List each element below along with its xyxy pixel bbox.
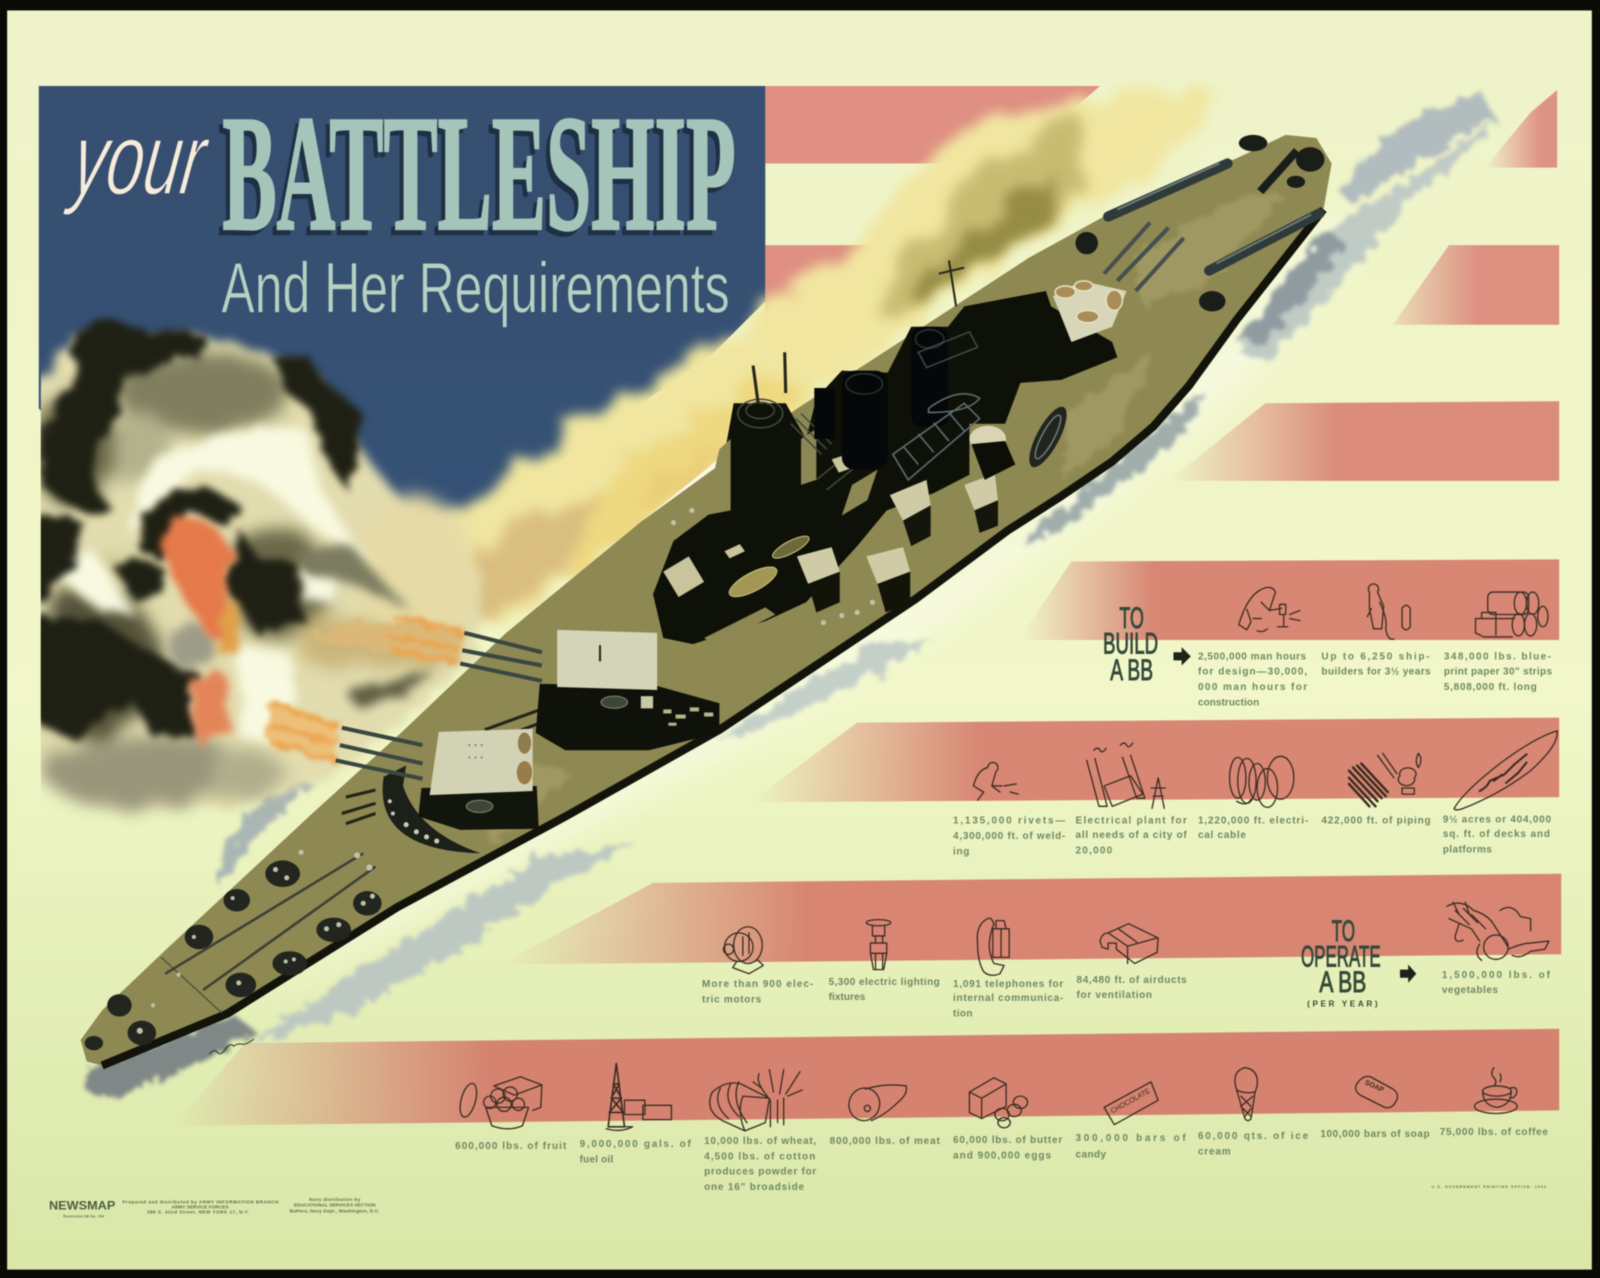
text: decks: 9½ acres or 404,000: [1443, 815, 1551, 826]
icon: ham: [845, 1085, 906, 1124]
text: telephones: 1,091 telephones for: [953, 979, 1063, 990]
second turret base: [536, 684, 719, 750]
bridge wings: [738, 399, 878, 490]
port edge highlight: [606, 449, 735, 553]
text: rivets: 4,300,000 ft. of weld-: [953, 831, 1065, 842]
funnels: [814, 327, 948, 470]
icon: oil derrick: [606, 1063, 671, 1130]
smoke: grey streaks: [167, 541, 434, 706]
icon: cable reels: [1230, 756, 1294, 807]
starboard motor launch: [1022, 402, 1074, 472]
hull side shadow: [102, 209, 1323, 1066]
icon: soap bar: [1356, 1076, 1397, 1108]
text: telephones: [953, 979, 1063, 1020]
text: electric cable: 1,220,000 ft. electri-: [1198, 816, 1308, 827]
icon: ice cream cone: [1235, 1068, 1257, 1121]
smoke: muzzle blast plumes: [267, 616, 464, 763]
illustration: battleship: [81, 135, 1332, 1066]
second turret barrels: [460, 633, 542, 681]
footer: newsmap logo: [49, 1198, 115, 1219]
heading: to build a battleship: [1103, 602, 1158, 687]
footer: distribution credit: ARMY SERVICE FORCES: [171, 1204, 229, 1209]
deck bolts: [671, 508, 875, 625]
footer: distribution credit: 386 S. 42nd Street, NEW YORK 17, N.Y.: [147, 1209, 249, 1214]
icon: electric motor: [723, 927, 763, 974]
text: airducts: [1077, 975, 1187, 1001]
text: butter and eggs: and 900,000 eggs: [953, 1150, 1051, 1161]
heading: to operate a battleship: OPERATE: [1301, 941, 1381, 974]
icon: vegetables: [1447, 902, 1549, 960]
funnel rims: [846, 330, 944, 394]
text: fuel oil: fuel oil: [580, 1154, 613, 1165]
text: ice cream: cream: [1198, 1146, 1231, 1157]
forward ladder boxes: [663, 454, 853, 597]
smoke: grey dome and tan shading: [20, 352, 474, 806]
aft turret hatches: [1055, 281, 1122, 323]
masts: [753, 260, 964, 403]
forward deck gun shadows: [342, 709, 541, 824]
icon: piping: [1349, 753, 1421, 806]
bow anchor chains: [161, 853, 376, 1013]
icon: telephone: [977, 918, 1009, 975]
icon: butter and eggs: [969, 1078, 1028, 1128]
text: fuel oil: [580, 1139, 691, 1165]
text: candy: candy: [1076, 1149, 1107, 1160]
text: decks: [1443, 815, 1551, 855]
icon: bread and wheat: [710, 1070, 802, 1131]
boats: [725, 532, 812, 602]
secondary gun houses: [797, 426, 1015, 612]
text: butter and eggs: [953, 1135, 1062, 1161]
text: rivets: ing: [953, 846, 969, 857]
stern catapult highlights: [1117, 163, 1311, 263]
forward turret hatches: [466, 732, 533, 812]
icon: electrical plant: [1087, 743, 1165, 808]
heading: to build a battleship: BUILD: [1103, 627, 1158, 660]
text: lighting: 5,300 electric lighting: [829, 977, 940, 988]
title: [62, 82, 736, 328]
text: telephones: tion: [953, 1009, 972, 1020]
forward turret: [430, 729, 533, 795]
smoke: dark masses: [20, 317, 363, 740]
icon: airduct: [1100, 924, 1158, 963]
text: rivets: [953, 816, 1065, 857]
text: airducts: 84,480 ft. of airducts: [1077, 975, 1187, 986]
text: vegetables: [1442, 970, 1551, 996]
text: shipbuilders: builders for 3½ years: [1321, 667, 1431, 678]
icon: draftsman: [1239, 587, 1300, 632]
text: electrical plant: all needs of a city of: [1076, 830, 1187, 841]
forward barbette: [383, 766, 481, 853]
heading: to build a battleship: A BB: [1110, 654, 1153, 687]
footer: newsmap logo: NEWSMAP: [49, 1198, 115, 1212]
text: lighting: fixtures: [829, 992, 866, 1003]
footer: navy distribution credit: [290, 1197, 380, 1213]
forward turret base: [418, 786, 539, 830]
second turret boats: [663, 707, 713, 726]
text: airducts: for ventilation: [1077, 990, 1152, 1001]
text: shipbuilders: Up to 6,250 ship-: [1321, 651, 1430, 662]
text: wheat and cotton: 4,500 lbs. of cotton: [704, 1151, 815, 1162]
text: soap: 100,000 bars of soap: [1320, 1129, 1430, 1140]
title word: your: your: [62, 102, 216, 216]
text: BATTLESHIP: [222, 82, 736, 265]
text: piping: 422,000 ft. of piping: [1321, 816, 1431, 827]
barbette dots: [388, 799, 439, 844]
panel: flag stripes: [173, 86, 1561, 1126]
arrow: to operate: [1400, 965, 1416, 983]
text: electrical plant: 20,000: [1076, 845, 1113, 856]
text: shipbuilders: [1321, 651, 1431, 678]
text: electrical plant: Electrical plant for: [1076, 816, 1187, 827]
text: candy: [1076, 1133, 1186, 1160]
subtitle: And Her Requirements: [221, 248, 730, 328]
footer: printing office mark: U.S. GOVERNMENT PRINTING OFFICE: 1943: [1432, 1185, 1546, 1189]
hull and deck: [81, 135, 1332, 1066]
text: wheat and cotton: 10,000 lbs. of wheat,: [704, 1136, 817, 1147]
aft turret: [1053, 281, 1127, 342]
icon: shipbuilder: [1367, 584, 1410, 639]
text: rivets: 1,135,000 rivets—: [953, 816, 1065, 827]
heading: to operate a battleship: TO: [1332, 915, 1355, 948]
icon: chocolate bar: CHOCOLATE: [1109, 1087, 1152, 1115]
text: fruit: 600,000 lbs. of fruit: [455, 1141, 567, 1152]
smoke: orange flame: [163, 516, 239, 750]
text: coffee: 75,000 lbs. of coffee: [1440, 1127, 1548, 1138]
text: wheat and cotton: [704, 1136, 817, 1193]
footer: distribution credit: [122, 1199, 279, 1214]
illustration: gun smoke explosion: [20, 317, 480, 806]
forward turret barrels: [336, 728, 422, 779]
icon: chocolate bar: [1104, 1082, 1158, 1125]
aft turret barrels: [1104, 223, 1184, 291]
illustration: funnel smoke trail: [403, 87, 1224, 628]
footer: navy distribution credit: Navy distribution by: [309, 1197, 361, 1202]
text: man hours: [1198, 651, 1307, 708]
text: man hours: for design—30,000,: [1198, 667, 1307, 678]
bow fittings: [137, 850, 375, 1034]
text: electric cable: cal cable: [1198, 830, 1246, 841]
second turret hatches: [600, 645, 653, 708]
stern catapults: [1108, 163, 1319, 271]
heading: to operate a battleship: A BB: [1319, 966, 1366, 999]
icon: fruit basket: [457, 1077, 542, 1129]
footer: navy distribution credit: EDUCATIONAL SERVICES SECTION: [294, 1202, 376, 1207]
icon: coffee cup: [1474, 1068, 1517, 1113]
text: meat: 800,000 lbs. of meat: [830, 1136, 940, 1147]
bow gun tubs: [85, 860, 382, 1050]
smoke: base cloud: [20, 337, 480, 806]
footer: newsmap logo: Restricted OB No. 194: [63, 1215, 104, 1219]
icon: soap bar: SOAP: [1363, 1078, 1385, 1094]
text: motors: [702, 979, 813, 1005]
heading: to operate a battleship: [1301, 915, 1381, 1008]
heading: to operate a battleship: (PER YEAR): [1307, 999, 1378, 1008]
text: decks: platforms: [1443, 844, 1492, 855]
text: blueprint paper: [1444, 651, 1552, 693]
text: decks: sq. ft. of decks and: [1443, 829, 1550, 840]
text: man hours: construction: [1198, 697, 1259, 708]
text: motors: More than 900 elec-: [702, 979, 813, 990]
crane lattice: [893, 332, 980, 480]
signature: [209, 1039, 254, 1054]
text: man hours: 000 man hours for: [1198, 682, 1307, 693]
text: motors: tric motors: [702, 994, 762, 1005]
footer: distribution credit: Prepared and distributed by ARMY INFORMATION BRANCH: [122, 1199, 279, 1204]
second turret: [557, 630, 657, 690]
icon: deck plan ship: [1454, 731, 1557, 810]
text: lighting: [829, 977, 940, 1003]
text: blueprint paper: print paper 30" strips: [1444, 667, 1552, 678]
text: fuel oil: 9,000,000 gals. of: [580, 1139, 691, 1150]
text: wheat and cotton: one 16" broadside: [704, 1182, 805, 1193]
text: ice cream: [1198, 1131, 1309, 1157]
icon: lighting fixture: [866, 920, 891, 970]
central superstructure: [653, 291, 1117, 644]
arrow: to build: [1173, 647, 1191, 666]
text: candy: 300,000 bars of: [1076, 1133, 1186, 1144]
stern cranes and gun tubs: [1076, 135, 1324, 311]
text: ice cream: 60,000 qts. of ice: [1198, 1131, 1309, 1142]
text: blueprint paper: 5,808,000 ft. long: [1444, 682, 1537, 693]
panel: blue title field: [39, 86, 765, 546]
text: electrical plant: [1076, 816, 1187, 856]
icon: blueprint paper logs: [1476, 592, 1548, 637]
text: blueprint paper: 348,000 lbs. blue-: [1444, 651, 1551, 662]
text: vegetables: vegetables: [1442, 985, 1498, 996]
smoke: white billows: [51, 427, 383, 743]
text: butter and eggs: 60,000 lbs. of butter: [953, 1135, 1062, 1146]
footer: navy distribution credit: BuPers, Navy Dept., Washington, D.C.: [290, 1208, 380, 1213]
icon: riveter: [973, 762, 1018, 800]
text: vegetables: 1,500,000 lbs. of: [1442, 970, 1551, 981]
text: electric cable: [1198, 816, 1308, 841]
deck light patches: [480, 194, 1286, 847]
superstructure decks: [704, 429, 878, 645]
illustration: wake and sea spray: [87, 90, 1500, 1097]
text: wheat and cotton: produces powder for: [704, 1167, 816, 1178]
heading: to build a battleship: TO: [1119, 602, 1144, 635]
text: man hours: 2,500,000 man hours: [1198, 651, 1307, 662]
text: telephones: internal communica-: [953, 993, 1063, 1004]
